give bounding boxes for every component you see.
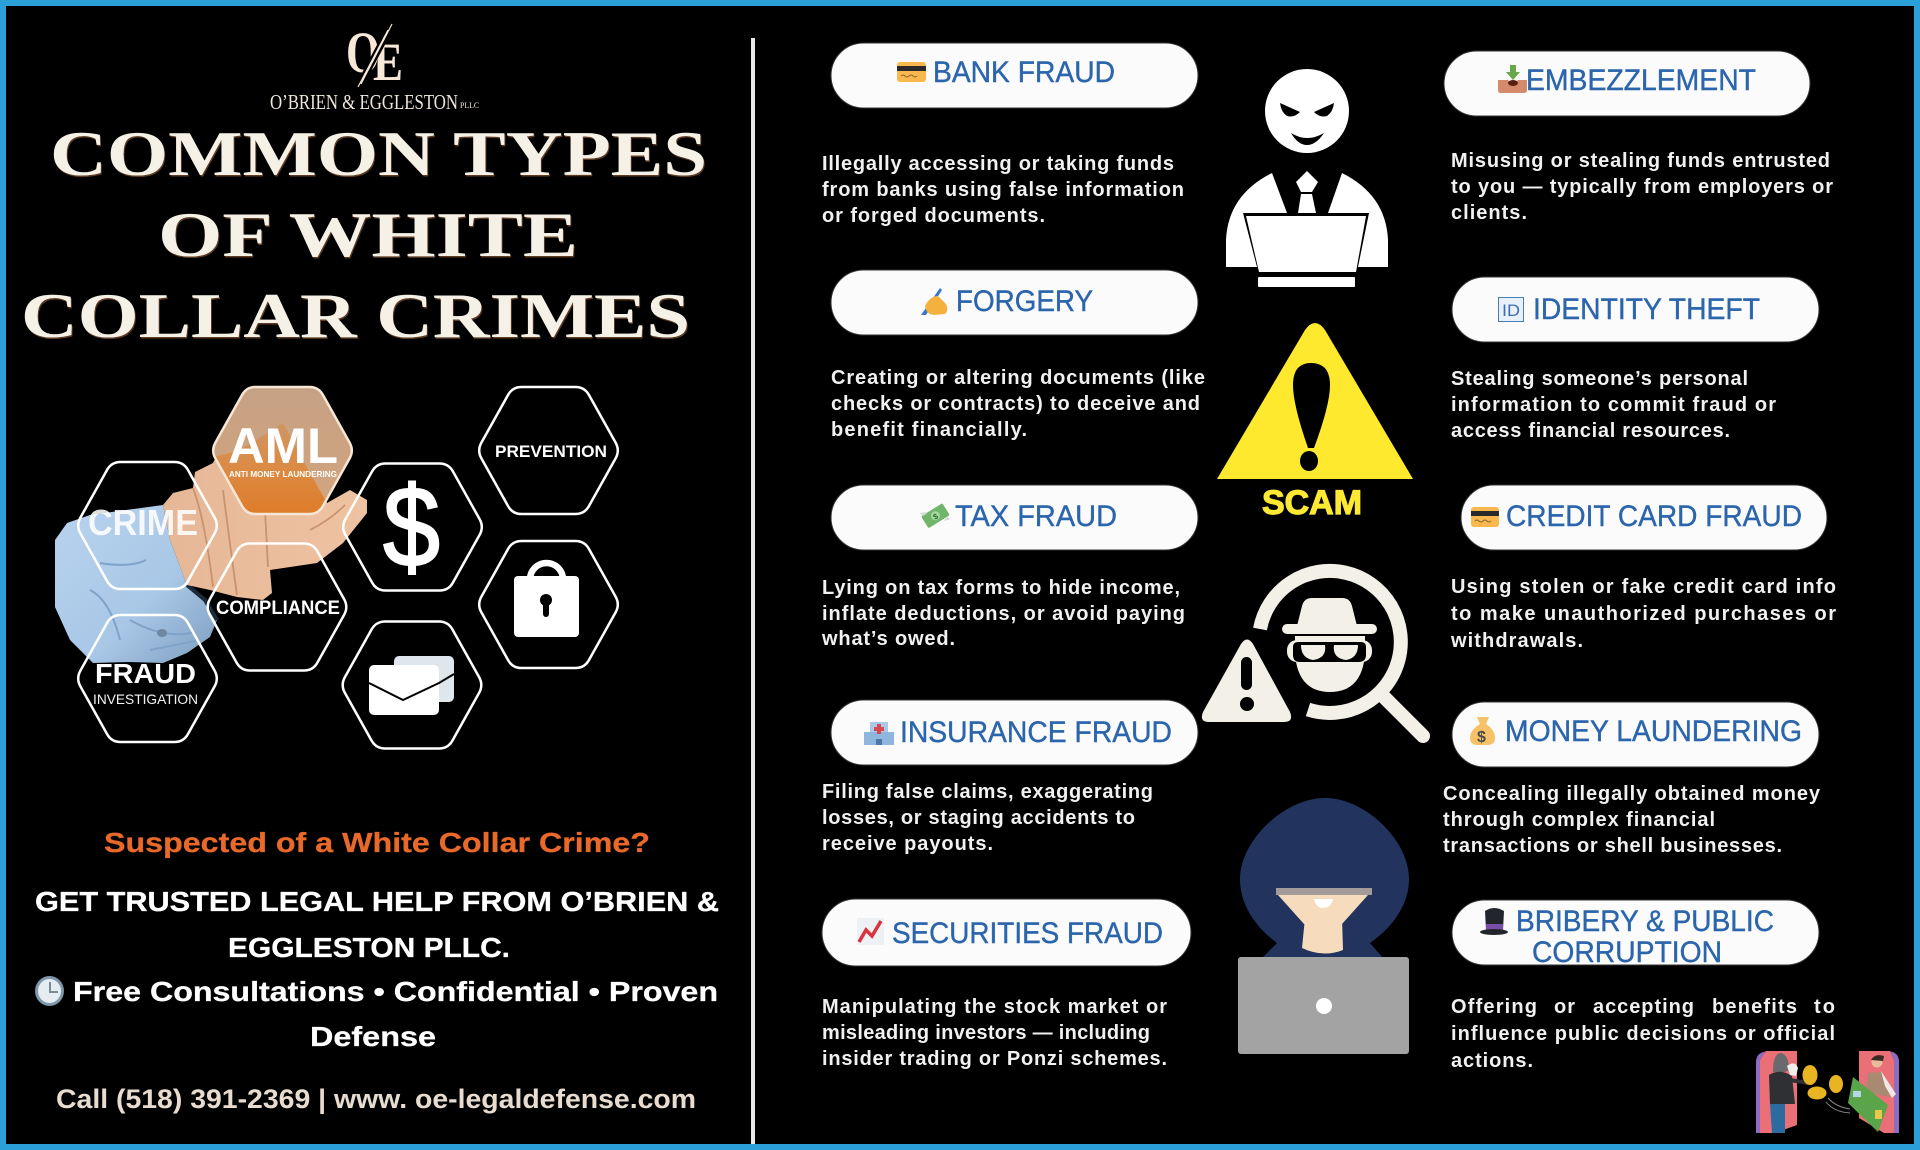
panel: bank fraud [822,43,1198,227]
description: insider trading or Ponzi schemes. [822,1048,1167,1070]
heading: BANK FRAUD [933,56,1115,89]
description: Creating or altering documents (like [831,367,1205,389]
pill [831,43,1198,108]
pill [1452,702,1819,767]
pill [1461,485,1827,550]
heading: CREDIT CARD FRAUD [1506,500,1802,533]
icon: money bag [1470,717,1495,746]
description: influence public decisions or official [1451,1023,1835,1045]
title [21,118,707,351]
description: Stealing someone’s personal [1451,368,1748,390]
compliance label: COMPLIANCE [216,598,340,619]
panel: identity theft [1451,277,1819,442]
icon: scam warning triangle [1217,323,1413,522]
description: withdrawals. [1450,630,1583,652]
dollar sign: $ [383,464,440,591]
pill [822,899,1191,966]
icon: credit card [897,62,926,82]
icon: chart [857,918,884,945]
icon: envelopes [369,656,454,715]
logo: O'Brien & Eggleston: O’BRIEN & EGGLESTON [270,90,458,114]
hexagon: prevention [479,387,618,514]
legal help line 2: EGGLESTON PLLC. [228,932,510,963]
pill [1452,277,1819,342]
icon: writing hand [921,288,947,315]
description: Lying on tax forms to hide income, [822,577,1180,599]
description: receive payouts. [822,833,993,855]
heading: IDENTITY THEFT [1533,293,1760,326]
description: Using stolen or fake credit card info [1451,576,1836,598]
panel: tax fraud [821,485,1198,650]
title: COLLAR CRIMES [21,280,690,351]
fraud label: FRAUD [95,658,196,689]
icon: padlock [514,563,579,637]
description [822,781,1153,855]
heading: TAX FRAUD [955,500,1117,533]
description: information to commit fraud or [1451,394,1776,416]
prevention label: PREVENTION [495,442,607,461]
description: from banks using false information [822,179,1184,201]
icon: top hat [1480,908,1508,935]
logo: O'Brien & Eggleston: E [373,32,403,92]
description: accepting [1593,996,1694,1018]
icon: businessman at laptop [1226,69,1388,287]
hexagon: lock [479,541,618,668]
features line: Free Consultations • Confidential • Proven [73,976,718,1007]
crime label: CRIME [88,502,198,543]
pill [831,270,1198,335]
hexagon: crime [78,462,217,589]
description: inflate deductions, or avoid paying [822,603,1185,625]
icon: ID badge [1498,298,1524,322]
description: losses, or staging accidents to [822,807,1135,829]
icon: money with wings: $ [931,511,940,522]
description: or forged documents. [822,205,1045,227]
panel: money laundering [1443,702,1821,857]
description [1451,368,1776,442]
description: benefits [1712,996,1797,1018]
question heading: Suspected of a White Collar Crime? [104,827,650,858]
logo: O'Brien & Eggleston: O [346,20,380,85]
heading: MONEY LAUNDERING [1505,715,1802,748]
hexagon: compliance [208,544,346,670]
icon: money bag: $ [1477,729,1486,746]
panel: insurance fraud [822,700,1198,855]
title: OF WHITE [158,199,578,270]
legal help line 1: GET TRUSTED LEGAL HELP FROM O’BRIEN & [35,886,719,917]
heading: INSURANCE FRAUD [900,716,1172,749]
panel: bribery and public corruption [1451,900,1835,1072]
title: COMMON TYPES [50,118,707,189]
AML label: AML [228,418,338,474]
description: to make unauthorized purchases or [1451,603,1836,625]
pill [831,700,1198,765]
logo: O'Brien & Eggleston: PLLC [460,101,479,110]
heading: EMBEZZLEMENT [1526,64,1756,97]
contact line: Call (518) 391-2369 | www. oe-legaldefense.com [56,1084,696,1114]
pill [1444,51,1810,116]
description: Manipulating the stock market or [822,996,1167,1018]
description: transactions or shell businesses. [1443,835,1782,857]
description: Offering [1451,996,1537,1018]
investigation label: INVESTIGATION [93,691,198,707]
heading line 2: CORRUPTION [1532,936,1722,969]
scam label: SCAM [1262,484,1362,522]
hexagon: dollar [343,464,482,590]
description: clients. [1451,202,1527,224]
hexagon graphic with pointing hand [55,387,618,748]
description: Illegally accessing or taking funds [822,153,1174,175]
pill [1452,900,1819,965]
description: Misusing or stealing funds entrusted [1451,150,1830,172]
AML sub-label: ANTI MONEY LAUNDERING [229,469,337,479]
call to action [35,827,719,1114]
icon: credit card [1471,507,1499,527]
heading: FORGERY [956,285,1093,318]
illustration: phone to phone credit card theft [1756,1051,1899,1133]
heading: SECURITIES FRAUD [892,917,1163,950]
panel: forgery [831,270,1205,441]
pill [831,485,1198,550]
description: through complex financial [1443,809,1715,831]
description [822,153,1184,227]
description [822,996,1167,1070]
description: what’s owed. [821,628,955,650]
panel: credit card fraud [1450,485,1836,652]
icon: detective in magnifier with alert [1202,571,1423,736]
icon: hooded hacker at laptop [1238,798,1409,1054]
panel: securities fraud [822,899,1191,1070]
AML outline [213,387,352,514]
description: access financial resources. [1451,420,1730,442]
features line 2: Defense [310,1021,436,1052]
description [821,577,1185,650]
description [831,367,1205,441]
hexagon: envelope [343,622,481,748]
description: or [1554,996,1575,1018]
icon: ID badge: ID [1502,301,1520,320]
shirt sleeve [55,505,217,663]
hexagon: fraud [78,615,217,742]
hexagon: AML [213,387,352,514]
description: Filing false claims, exaggerating [822,781,1153,803]
icon: hospital [864,722,894,745]
description: to you — typically from employers or [1451,176,1833,198]
description: misleading investors — including [822,1022,1150,1044]
logo: O'Brien & Eggleston [270,20,479,114]
description: benefit financially. [831,419,1027,441]
description [1451,150,1833,224]
description [1451,996,1835,1072]
description [1450,576,1836,652]
heading line 1: BRIBERY & PUBLIC [1516,905,1774,938]
panel: embezzlement [1444,51,1833,224]
icon: inbox tray [1498,65,1527,93]
description: to [1814,996,1835,1018]
AML finger highlight [216,423,325,513]
icon: money with wings [919,500,952,532]
description: actions. [1451,1050,1533,1072]
description: checks or contracts) to deceive and [831,393,1200,415]
description: Concealing illegally obtained money [1443,783,1821,805]
hand [163,423,367,600]
icon: clock [35,976,64,1006]
description [1443,783,1821,857]
